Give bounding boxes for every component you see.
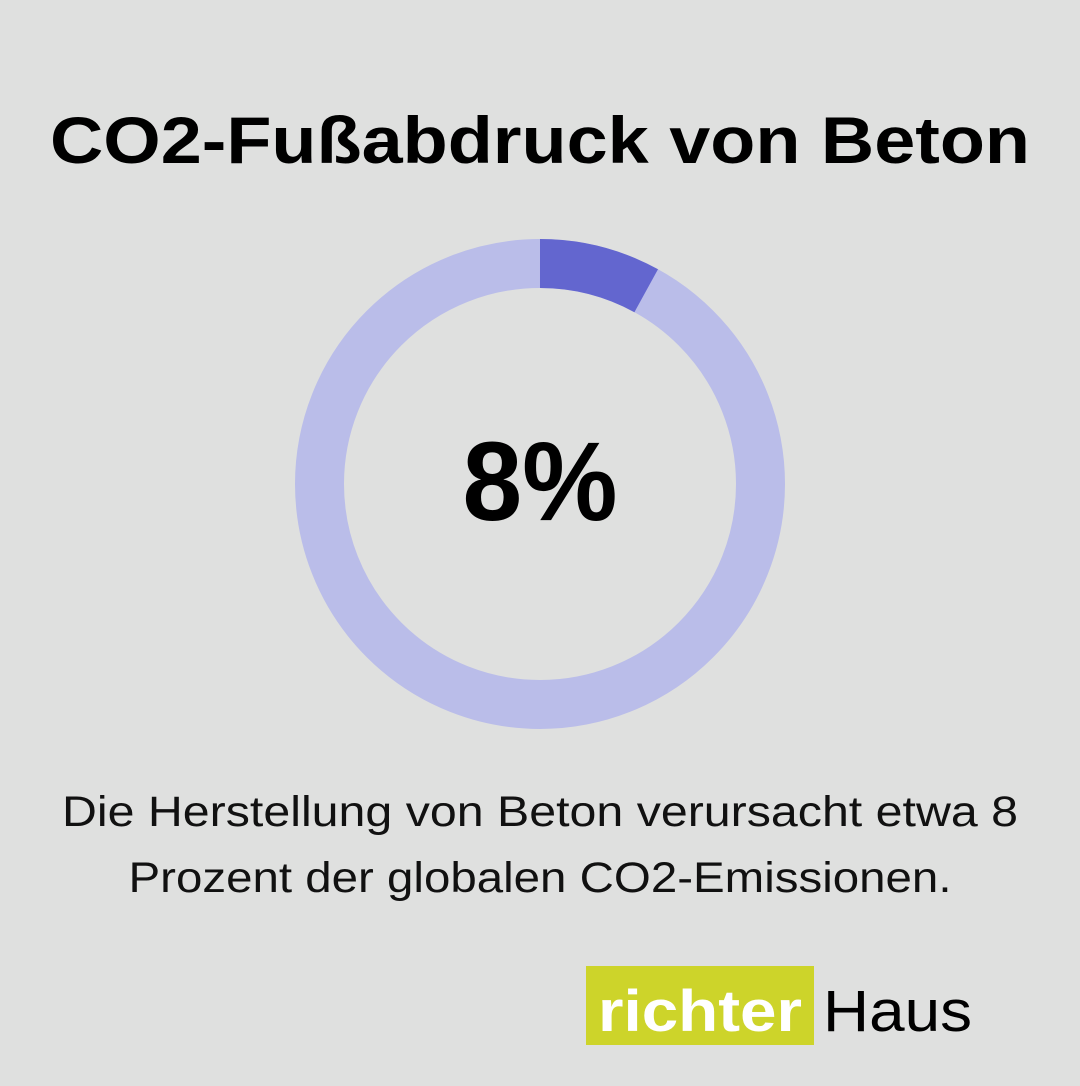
title: CO2-Fußabdruck von Beton [50,103,1030,177]
logo: richter Haus [586,966,972,1045]
description text: Prozent der globalen CO2-Emissionen. [128,854,952,902]
logo: richter Haus: Haus [823,979,972,1044]
donut chart [320,264,760,704]
description text [62,788,1018,902]
logo: richter Haus: richter [598,979,802,1044]
description text: Die Herstellung von Beton verursacht etwa 8 [62,788,1018,836]
percentage value: 8% [462,419,618,544]
